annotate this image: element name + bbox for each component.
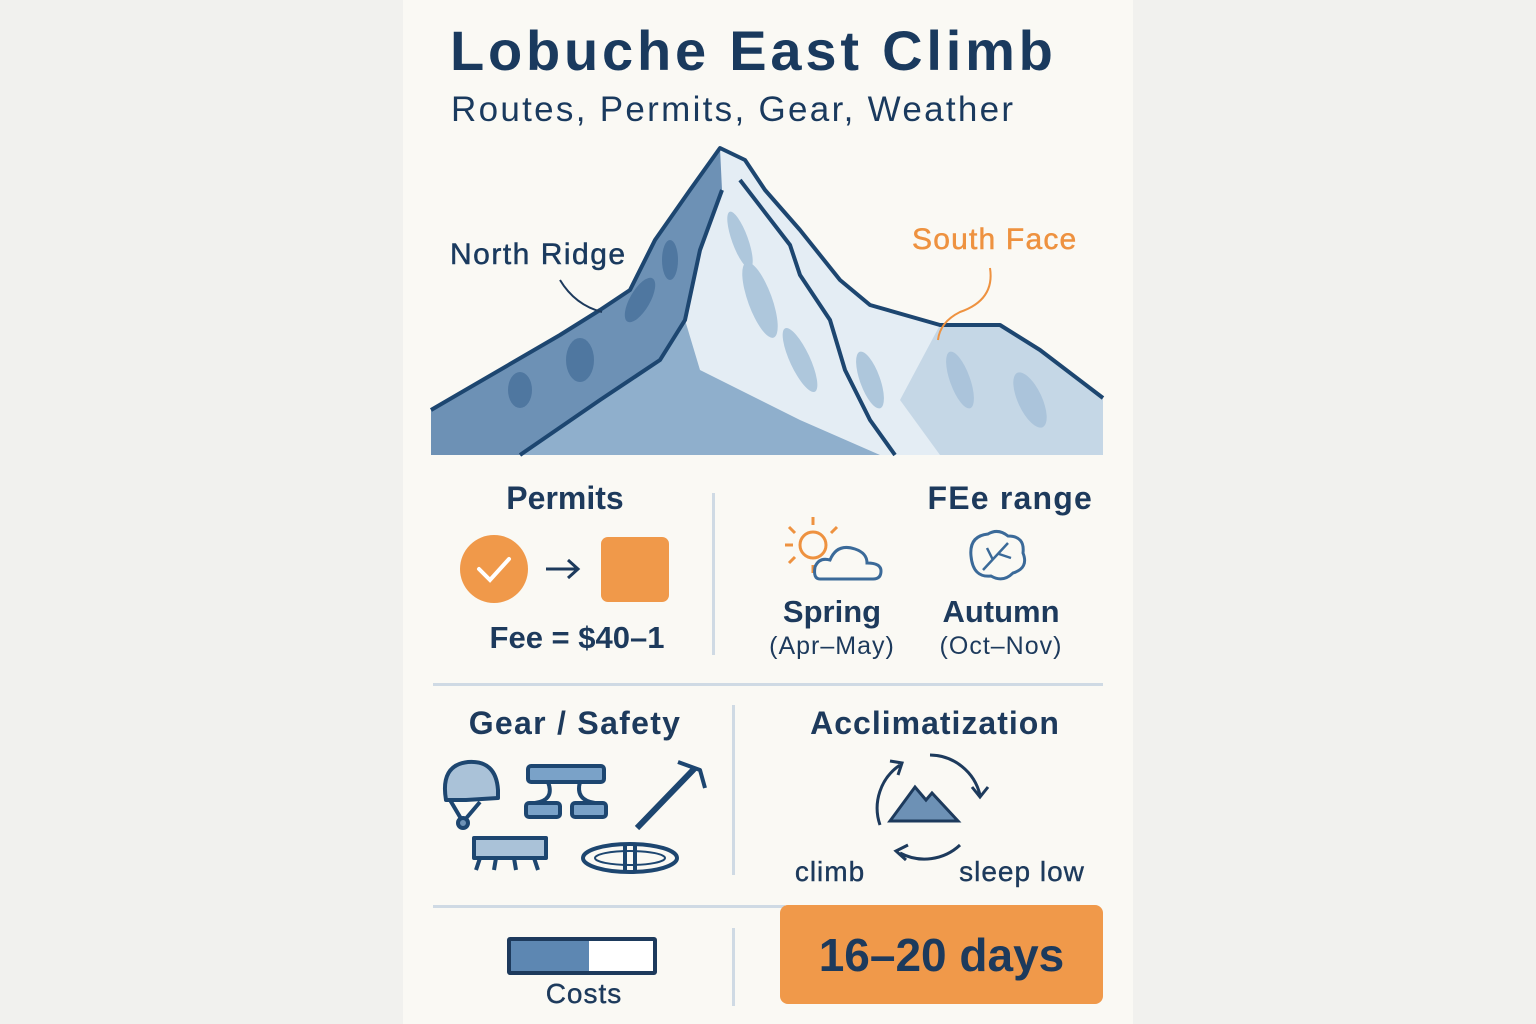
callout: duration — [780, 905, 1103, 1004]
season: Autumn: (Oct–Nov) — [940, 632, 1062, 660]
icon: orange square — [601, 537, 669, 602]
label: North Ridge: North Ridge — [450, 238, 627, 271]
subtitle: Routes, Permits, Gear, Weather — [451, 90, 1015, 129]
heading: FEe range: FEe range — [927, 480, 1093, 516]
heading: Permits: Permits — [506, 480, 624, 516]
icon: acclimatization cycle — [876, 754, 990, 862]
label: South Face: South Face — [912, 223, 1077, 256]
panel: main — [403, 0, 1133, 1024]
icon: sun and cloud — [785, 517, 882, 580]
cost bar — [507, 937, 657, 975]
label: sleep low: sleep low — [959, 856, 1085, 887]
heading: Gear / Safety: Gear / Safety — [469, 705, 681, 741]
callout: duration: 16–20 days — [819, 928, 1064, 980]
heading: Acclimatization: Acclimatization — [810, 705, 1060, 741]
fee text: Fee = $40–1 — [490, 620, 664, 655]
season: Autumn: Autumn — [942, 594, 1060, 629]
season: Spring: (Apr–May) — [769, 632, 895, 660]
title: Lobuche East Climb — [450, 19, 1057, 82]
season: Spring: Spring — [783, 594, 881, 629]
label: Costs: Costs — [546, 978, 622, 1009]
icon: check circle — [460, 535, 528, 603]
label: climb: climb — [795, 856, 865, 887]
arrow — [546, 558, 580, 579]
icons: gear — [442, 760, 707, 874]
icon: leaf — [969, 530, 1026, 580]
season: Spring — [769, 594, 895, 660]
season: Autumn — [940, 594, 1062, 660]
